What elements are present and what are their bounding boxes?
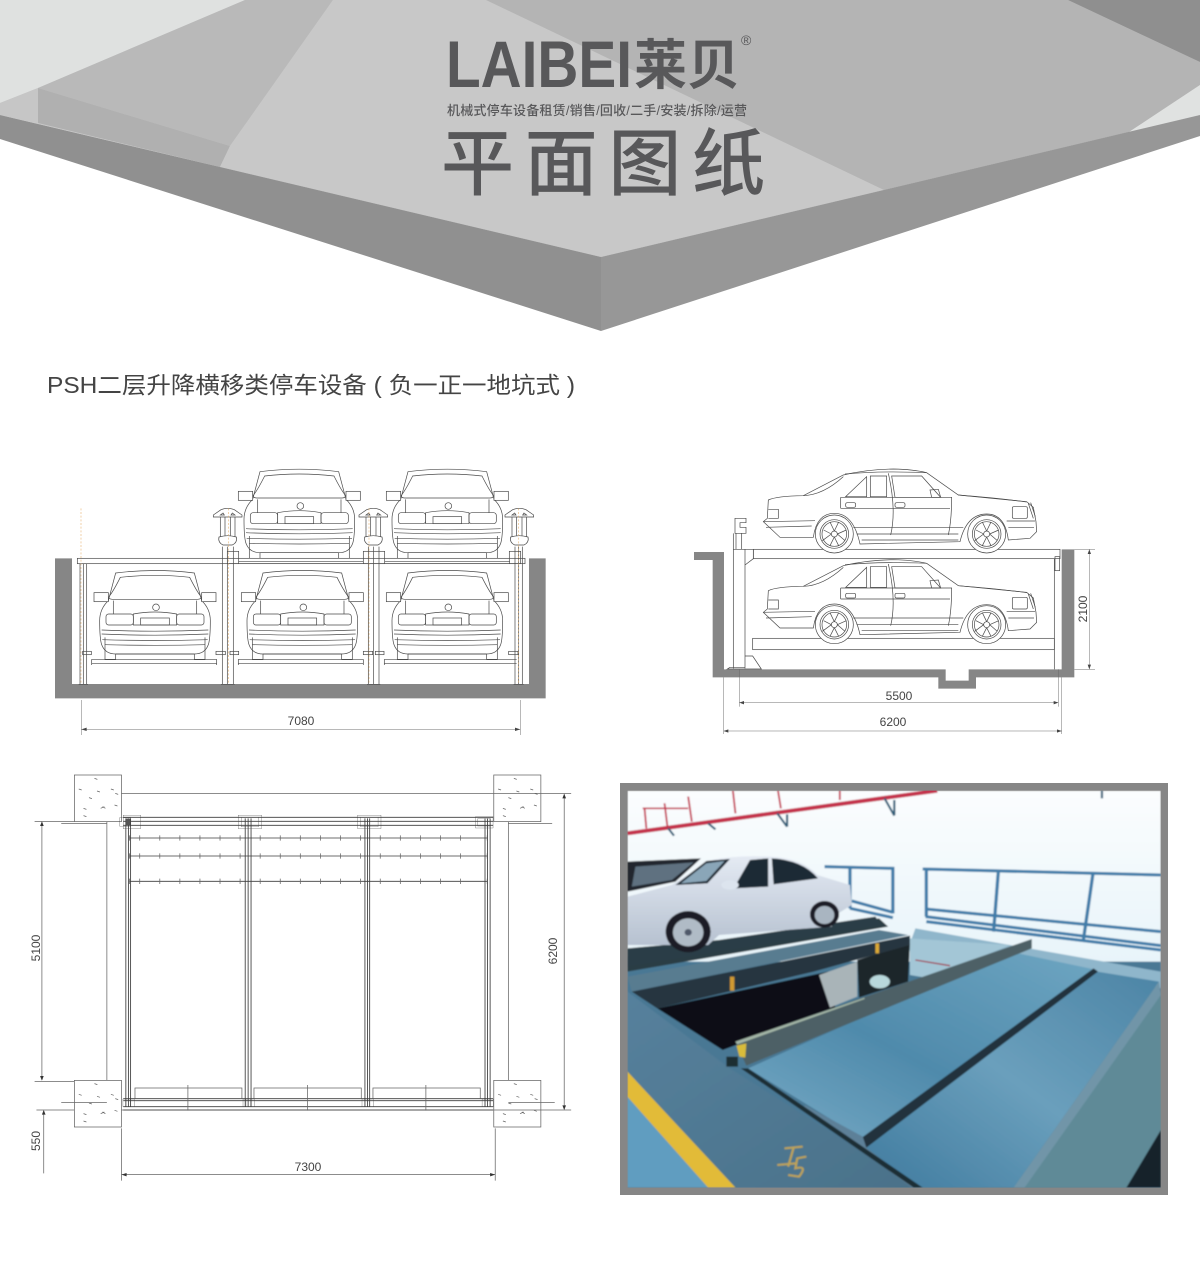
pit wall bbox=[55, 558, 546, 698]
wall bbox=[627, 791, 1161, 977]
post caps bbox=[213, 508, 534, 545]
logo: LAIBEI 莱贝: LAIBEI bbox=[446, 27, 632, 101]
base floor bbox=[627, 962, 1161, 1188]
car wheels bbox=[666, 901, 839, 952]
tick marks bbox=[130, 835, 487, 884]
dimension lines bbox=[724, 549, 1095, 734]
subtitle: PSH二层升降横移类停车设备 ( 负一正一地坑式 ) bbox=[47, 372, 575, 398]
pit wall bbox=[694, 549, 1074, 689]
drawing geometry bbox=[35, 775, 571, 1181]
main heading: 平面图纸: 平面图纸 bbox=[441, 124, 765, 205]
dark pit bbox=[657, 972, 835, 1050]
pallet divider bbox=[861, 968, 1098, 1148]
side section drawing bbox=[694, 469, 1095, 734]
dimension arrows bbox=[40, 794, 566, 1176]
header banner bbox=[0, 0, 1200, 331]
guide rails bbox=[126, 818, 490, 1107]
car support beam bbox=[628, 916, 878, 958]
logo: LAIBEI 莱贝: ® bbox=[741, 32, 752, 48]
pipe hangers bbox=[668, 791, 1102, 836]
mirror bbox=[728, 882, 740, 890]
drawing geometry bbox=[55, 469, 546, 735]
right pallet bbox=[866, 972, 1159, 1188]
yellow stripe bbox=[627, 1072, 735, 1188]
silver car body bbox=[627, 856, 852, 945]
lower deck cars bbox=[94, 570, 508, 660]
dimension line 7080 bbox=[81, 700, 520, 735]
grey panel bbox=[819, 962, 857, 1008]
left foreground plate bbox=[627, 992, 919, 1188]
dimension: 5100: 5100 bbox=[29, 934, 43, 961]
bottom post brackets bbox=[123, 1099, 493, 1107]
far pit wall bbox=[910, 938, 1010, 978]
outline lines bbox=[35, 793, 571, 1110]
dimension arrows bbox=[724, 549, 1091, 733]
dimension: 2100: 2100 bbox=[1076, 595, 1090, 622]
top post brackets bbox=[120, 815, 493, 829]
beams bbox=[123, 817, 493, 1110]
dimension: 550: 550 bbox=[29, 1131, 43, 1151]
upper car bbox=[763, 469, 1037, 553]
logo: LAIBEI 莱贝: 莱贝 bbox=[634, 36, 740, 96]
right edge beam bbox=[1014, 982, 1161, 1188]
photo of the parking equipment bbox=[627, 791, 1161, 1188]
dimension: 7080: 7080 bbox=[288, 714, 315, 728]
slogan: 机械式停车设备租赁/销售/回收/二手/安装/拆除/运营 bbox=[447, 103, 747, 118]
dimension: 6200: 6200 bbox=[546, 937, 560, 964]
main pallet bbox=[748, 952, 1097, 1140]
front diagonal edge bbox=[741, 1068, 923, 1188]
entry trays bbox=[135, 1085, 480, 1111]
number mark bbox=[777, 1147, 806, 1177]
machinery bbox=[857, 943, 910, 998]
drawing geometry bbox=[694, 469, 1095, 734]
far floor bbox=[908, 928, 1161, 988]
upper rail beam bbox=[627, 918, 888, 972]
orange centre lines bbox=[81, 508, 519, 683]
dimension: 7300: 7300 bbox=[295, 1160, 322, 1174]
posts and platforms bbox=[77, 547, 525, 684]
post and platforms bbox=[727, 518, 1060, 669]
upper platform face bbox=[632, 936, 910, 1008]
guard railing bbox=[825, 867, 1161, 950]
front section drawing bbox=[55, 469, 546, 735]
plan view drawing bbox=[29, 775, 571, 1181]
car windows bbox=[675, 858, 818, 888]
lower-left floor bbox=[627, 1097, 708, 1188]
far right floor bbox=[1017, 992, 1161, 1188]
dimension lines bbox=[42, 794, 564, 1181]
cross rails bbox=[130, 838, 488, 881]
lower car bbox=[763, 560, 1037, 644]
dimension: 6200: 6200 bbox=[880, 715, 907, 729]
upper deck cars bbox=[238, 469, 508, 558]
front diagonal strip bbox=[805, 1105, 919, 1188]
photo frame bbox=[620, 783, 1168, 1195]
concrete columns bbox=[74, 775, 541, 1127]
far car bbox=[627, 858, 701, 892]
yellow markers bbox=[875, 943, 879, 953]
red sprinkler pipe bbox=[627, 791, 937, 833]
dimension: 5500: 5500 bbox=[886, 689, 913, 703]
lateral beam bbox=[735, 939, 1032, 1066]
upper platform deck bbox=[627, 930, 908, 992]
